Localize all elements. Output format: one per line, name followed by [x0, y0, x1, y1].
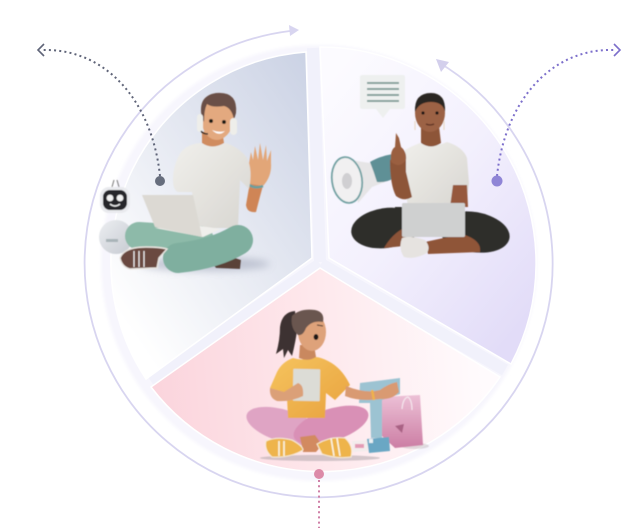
- ponytail: [276, 311, 297, 358]
- connector: left dotted arrow: [38, 44, 165, 186]
- back shoe: [213, 257, 241, 269]
- panel: top-left support sector: [111, 52, 312, 379]
- figure: woman with tablet and shopping bags: [242, 310, 429, 461]
- laptop: [155, 226, 221, 237]
- blue bag and card: [352, 378, 400, 453]
- white shirt: [402, 142, 469, 207]
- connector: bottom dotted line: [314, 469, 324, 528]
- pale halo disc behind panels: [101, 45, 537, 481]
- arc arrowhead: top right: [436, 59, 449, 72]
- shins: [384, 228, 415, 248]
- neck and head: [421, 126, 441, 146]
- neck and head: [299, 345, 316, 360]
- hand on tablet: [270, 383, 303, 401]
- waving arm: [246, 182, 264, 212]
- shirt: [173, 143, 251, 228]
- white shoe: [400, 237, 429, 258]
- shoe: [120, 247, 167, 269]
- pink bag: [382, 395, 423, 448]
- panel: top-right marketing sector: [320, 47, 536, 364]
- neck and head: [202, 130, 224, 146]
- laptop: [402, 203, 465, 237]
- reaching arm: [345, 382, 399, 400]
- arm: [390, 156, 412, 199]
- figure: man with headset, laptop and robot: [99, 93, 271, 271]
- green trousers: [139, 236, 238, 258]
- yellow shoes: [266, 438, 303, 457]
- tablet: [293, 369, 320, 401]
- black trousers: [349, 203, 513, 258]
- megaphone: [329, 154, 395, 205]
- crossed shin: [300, 435, 322, 452]
- panel: bottom shopping sector: [151, 268, 500, 472]
- shirt: [270, 357, 350, 418]
- arc arrow: ring to top centre: [85, 25, 553, 497]
- speech bubble: [360, 75, 405, 118]
- pink trousers: [242, 398, 373, 453]
- icon: robot: [99, 180, 133, 254]
- panel gap lines: [150, 48, 505, 380]
- connector: right dotted arrow: [492, 44, 620, 186]
- figure: woman with megaphone and laptop: [329, 75, 513, 258]
